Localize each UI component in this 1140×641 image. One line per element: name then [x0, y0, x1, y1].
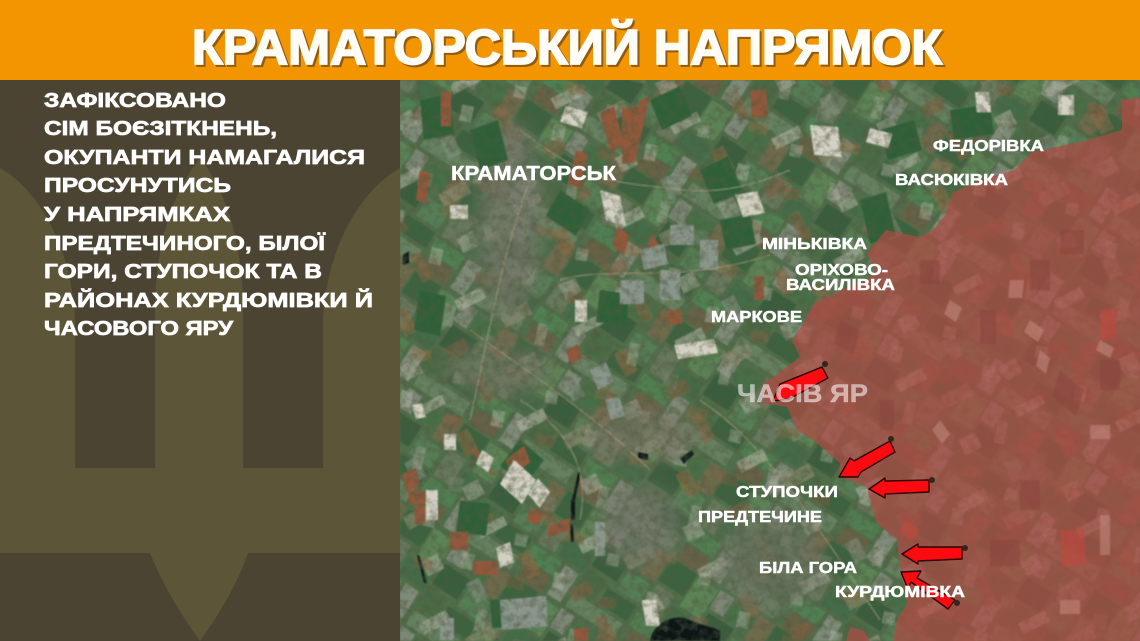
label: Markove: МАРКОВЕ — [711, 309, 802, 326]
icon: drone mark — [954, 600, 960, 606]
map: occupied territory red overlay — [763, 97, 1140, 641]
arrow: towards Bila Hora — [902, 544, 968, 564]
title: КРАМАТОРСЬКИЙ НАПРЯМОК — [192, 20, 942, 75]
label: Vasylivka: ВАСИЛІВКА — [786, 277, 896, 294]
arrow: Chasiv Yar — [773, 361, 828, 401]
label: Chasiv Yar: ЧАСІВ ЯР — [737, 380, 868, 408]
text block: situation summary: ЧАСОВОГО ЯРУ — [44, 318, 234, 340]
brown fields — [402, 90, 768, 641]
text block: situation summary: СІМ БОЄЗІТКНЕНЬ, — [44, 118, 277, 140]
label: Vasiukivka: ВАСЮКІВКА — [895, 172, 1009, 189]
title shadow: КРАМАТОРСЬКИЙ НАПРЯМОК — [194, 22, 944, 77]
text block: situation summary: У НАПРЯМКАХ — [44, 204, 231, 226]
arrow: towards Stupochky north — [839, 436, 895, 477]
map: gullies and roads — [470, 130, 880, 620]
icon: trident watermark — [0, 158, 400, 641]
label: Predtechyne: ПРЕДТЕЧИНЕ — [698, 509, 822, 526]
label: Kurdiumivka: КУРДЮМІВКА — [835, 584, 966, 601]
label: Stupochky: СТУПОЧКИ — [736, 484, 838, 501]
text block: situation summary: ГОРИ, СТУПОЧОК ТА В — [44, 261, 322, 283]
map: satellite background — [400, 80, 1140, 641]
panel: left text panel — [0, 80, 400, 641]
icon: drone mark — [888, 436, 894, 442]
label: Orikhovo: ОРІХОВО- — [795, 262, 888, 279]
arrow: towards Kurdiumivka — [901, 571, 960, 609]
text block: situation summary: ПРОСУНУТИСЬ — [44, 175, 231, 197]
label: Kramatorsk: КРАМАТОРСЬК — [451, 163, 617, 185]
header bar — [0, 0, 1140, 80]
water bodies — [403, 251, 720, 641]
icon: drone mark — [962, 545, 968, 551]
text block: situation summary: ПРЕДТЕЧИНОГО, БІЛОЇ — [44, 232, 326, 255]
text block: situation summary: РАЙОНАХ КУРДЮМІВКИ Й — [44, 288, 373, 312]
text block: situation summary — [44, 90, 373, 340]
grey fields — [440, 225, 718, 640]
arrow: towards Stupochky east — [869, 477, 935, 498]
dark green fields — [414, 86, 994, 628]
text block: situation summary: ЗАФІКСОВАНО — [44, 90, 226, 112]
label: Minkivka: МІНЬКІВКА — [762, 236, 868, 253]
icon: drone mark — [822, 361, 828, 367]
text block: situation summary: ОКУПАНТИ НАМАГАЛИСЯ — [44, 147, 365, 169]
label: Fedorivka: ФЕДОРІВКА — [933, 138, 1045, 155]
icon: drone mark — [929, 477, 935, 483]
label: Bila Hora: БІЛА ГОРА — [759, 560, 858, 577]
red-zone field texture — [834, 230, 1120, 614]
map labels — [451, 138, 1045, 601]
white fields — [412, 92, 1074, 626]
